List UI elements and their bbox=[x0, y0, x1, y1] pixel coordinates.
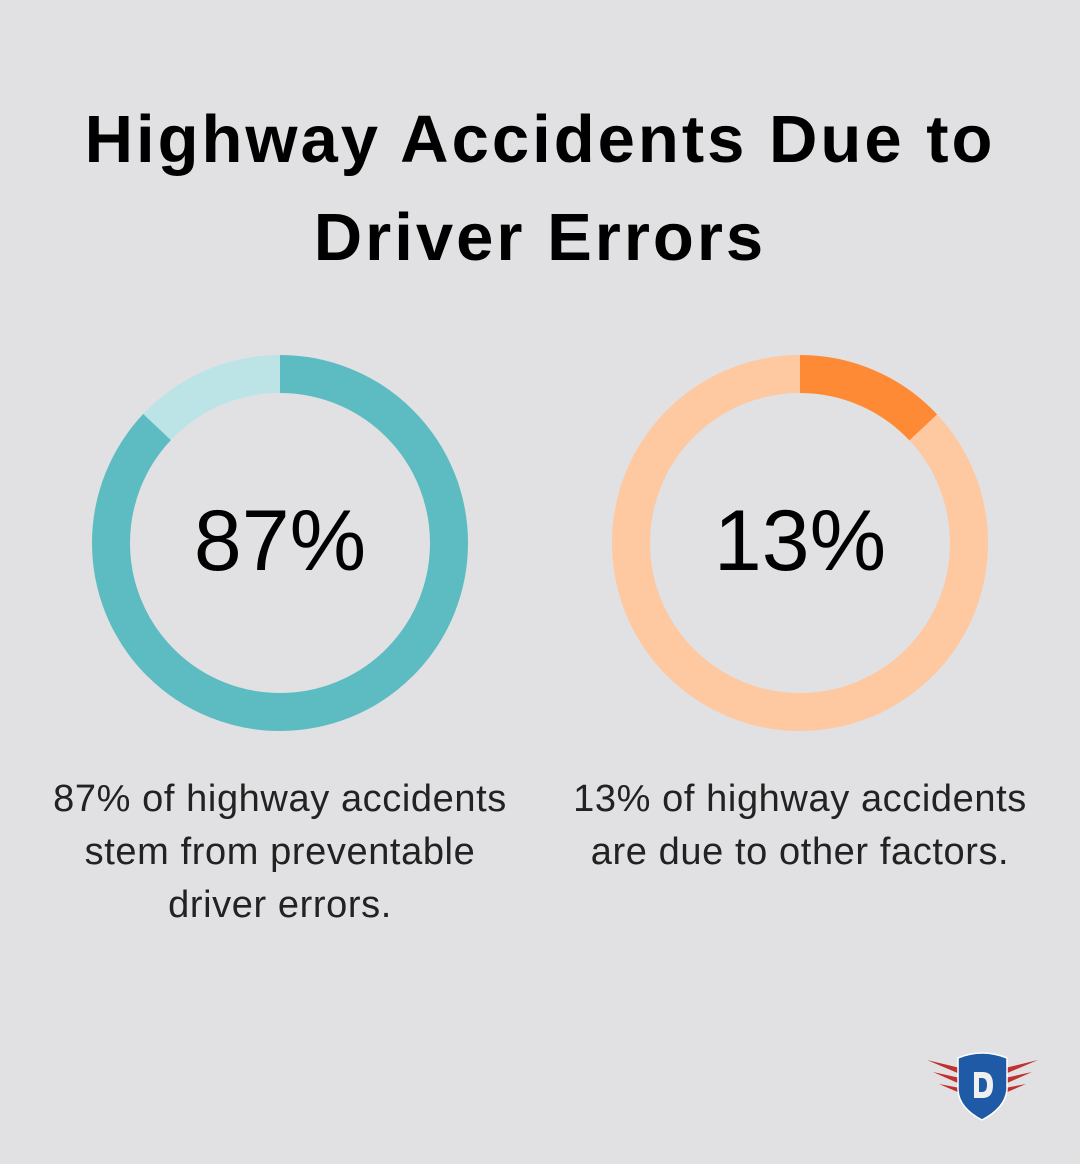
title: Driver Errors bbox=[314, 200, 766, 275]
text: 87% description: driver errors. bbox=[168, 884, 392, 926]
icon: logo shield bbox=[927, 1052, 1038, 1121]
donut: 13% bbox=[612, 355, 988, 731]
donut: 87%: 87% bbox=[194, 493, 366, 589]
text: 13% description: are due to other factors. bbox=[591, 831, 1009, 873]
text: 13% description bbox=[573, 778, 1027, 873]
donut: 87% bbox=[92, 355, 468, 731]
text: 87% description bbox=[53, 778, 507, 926]
title bbox=[85, 102, 995, 275]
text: 87% description: stem from preventable bbox=[85, 831, 475, 873]
text: 13% description: 13% of highway accidents bbox=[573, 778, 1027, 820]
donut: 13%: 13% bbox=[714, 493, 886, 589]
title: Highway Accidents Due to bbox=[85, 102, 995, 177]
text: 87% description: 87% of highway accidents bbox=[53, 778, 507, 820]
